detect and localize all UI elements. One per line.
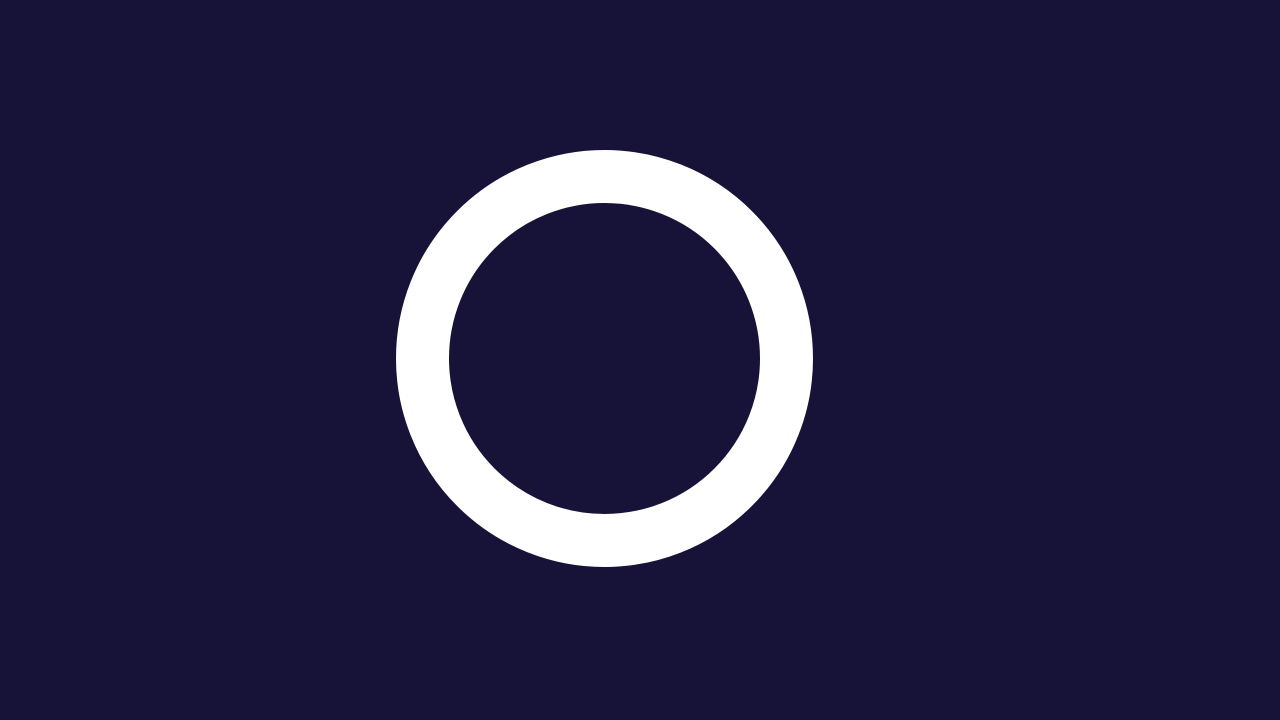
icon: white ring: [422, 176, 786, 540]
